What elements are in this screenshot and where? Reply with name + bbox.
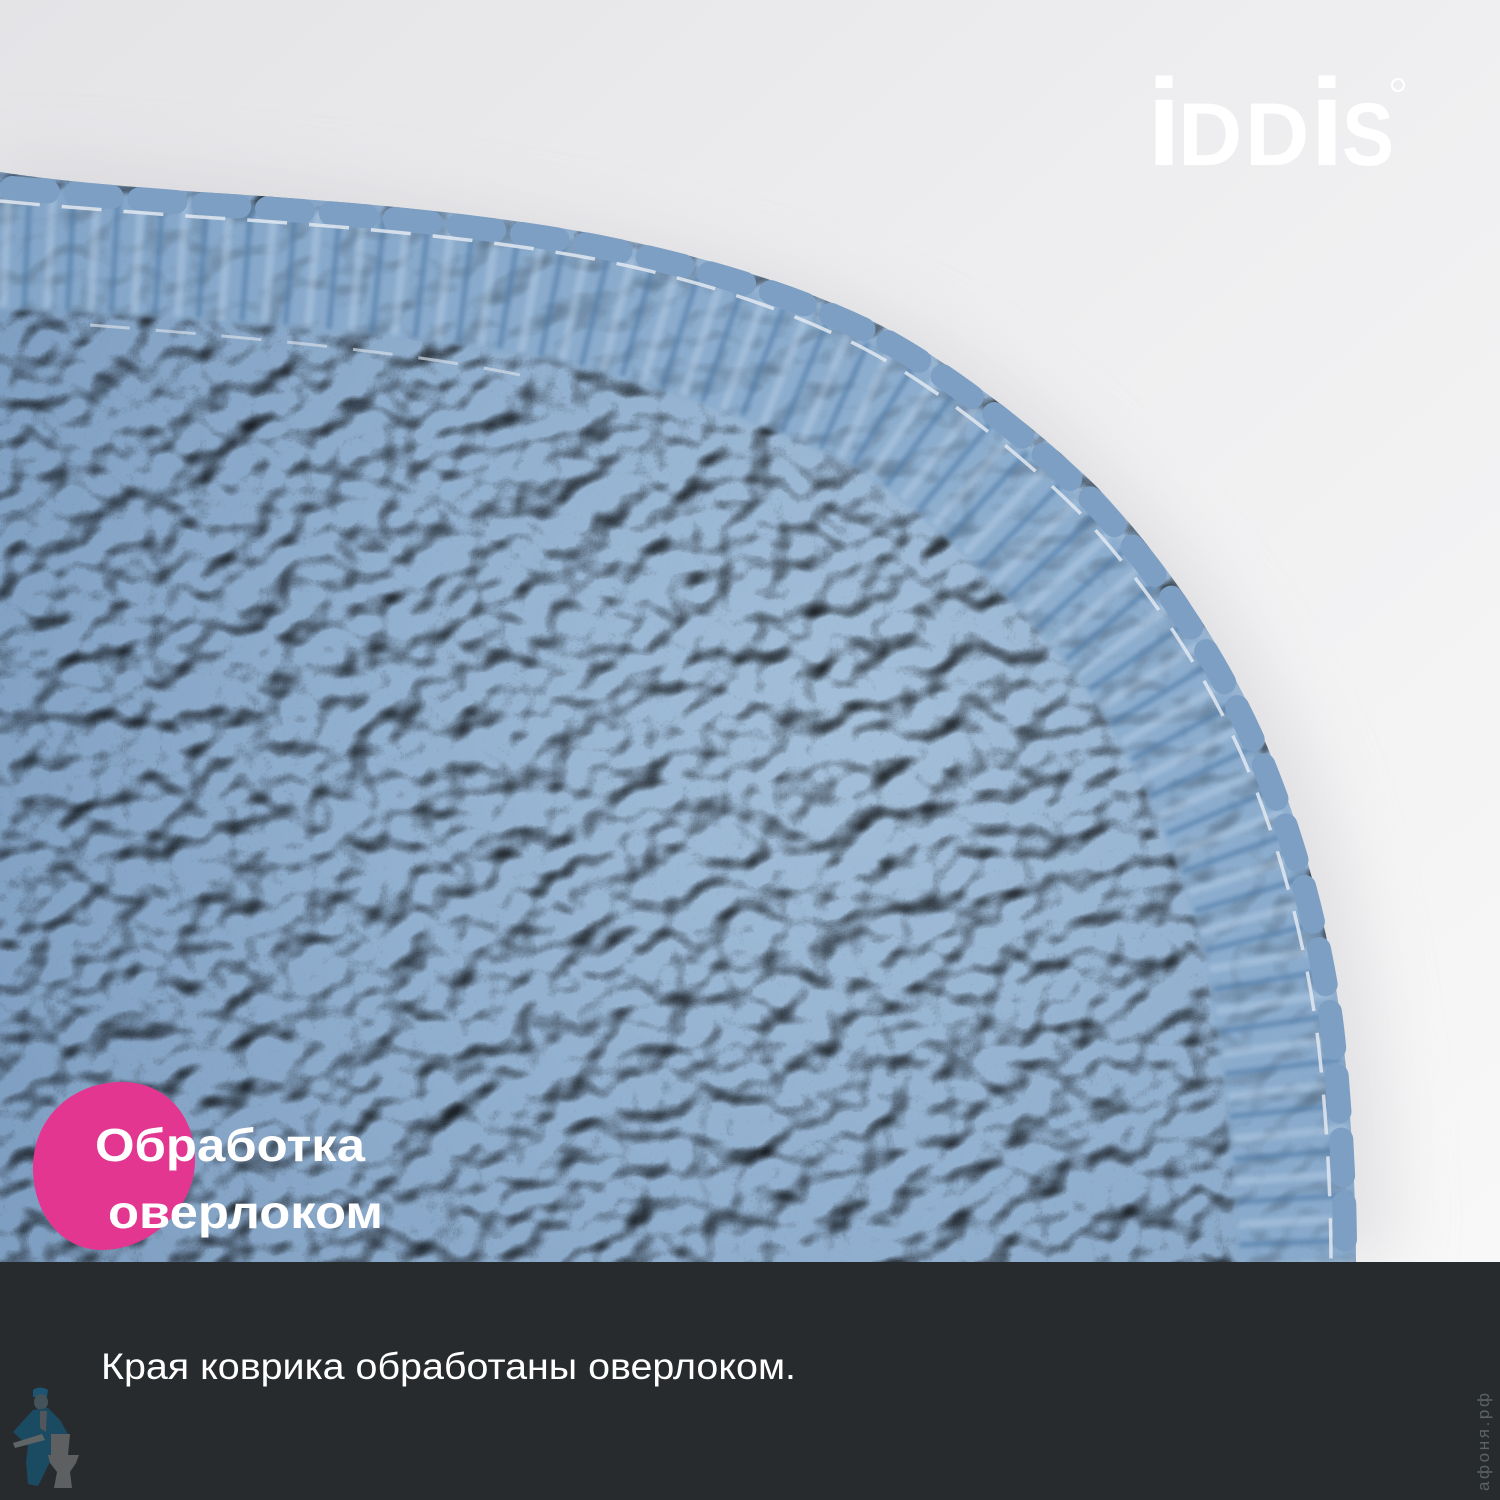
heading: overlock finishing: оверлоком [108, 1186, 383, 1238]
icon: plumber with toilet [13, 1388, 79, 1488]
body text: Края коврика обработаны оверлоком. [101, 1346, 796, 1387]
inner seam [90, 325, 520, 375]
logo: IDDIS: D [1178, 84, 1242, 184]
heading: overlock finishing: Обработка [95, 1119, 365, 1171]
logo: IDDIS: D [1245, 84, 1309, 184]
logo: IDDIS [1147, 55, 1404, 192]
seam thread [0, 201, 1331, 1262]
mat shadow on surface [0, 160, 1395, 1262]
scalloped binding [12, 188, 1345, 1250]
watermark: afonya.rf: афоня.рф [1474, 1393, 1493, 1491]
bottom dark panel [0, 1262, 1500, 1500]
mat base colour [0, 150, 1400, 1262]
photo: blue bath mat corner [0, 150, 1400, 1270]
logo: IDDIS: i [1147, 55, 1181, 192]
logo: IDDIS: S [1342, 84, 1394, 184]
heading: overlock finishing [95, 1119, 383, 1238]
logo: IDDIS: i [1310, 55, 1344, 192]
mat plush texture [0, 150, 1400, 1262]
callout: pink blob [33, 1082, 195, 1250]
overlock edge band [0, 248, 1298, 1270]
